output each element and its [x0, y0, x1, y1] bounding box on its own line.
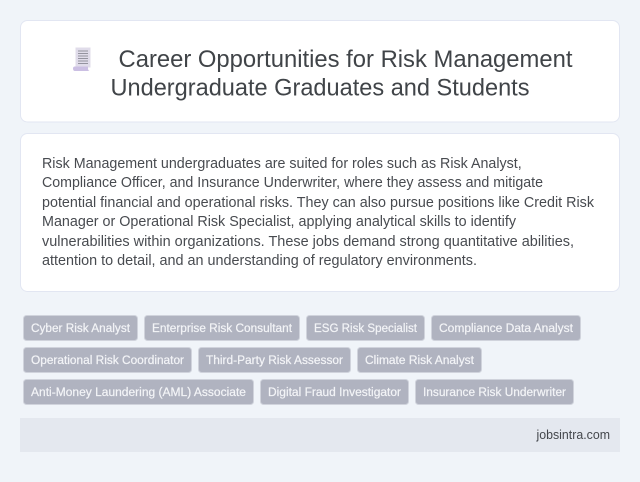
tag: Enterprise Risk Consultant: [144, 316, 300, 340]
tag: Digital Fraud Investigator: [260, 380, 408, 404]
description text: Compliance Officer, and Insurance Underwriter, where they assess and mitigate: [42, 175, 543, 191]
tag: Digital Fraud Investigator: Digital Fraud Investigator: [268, 385, 401, 399]
tag: Compliance Data Analyst: [432, 316, 580, 340]
tag: Climate Risk Analyst: [358, 348, 482, 372]
description text: Risk Management undergraduates are suited for roles such as Risk Analyst,: [42, 156, 522, 172]
tag: Insurance Risk Underwriter: [416, 380, 574, 404]
footer source: jobsintra.com: [536, 427, 610, 442]
heading: [110, 46, 573, 102]
tag: Operational Risk Coordinator: [24, 348, 192, 372]
tag: Operational Risk Coordinator: Operational Risk Coordinator: [31, 353, 184, 367]
tag: Anti-Money Laundering (AML) Associate: Anti-Money Laundering (AML) Associate: [31, 385, 246, 399]
heading: Career Opportunities for Risk Management: [118, 46, 573, 73]
tag: ESG Risk Specialist: [306, 316, 424, 340]
tag: ESG Risk Specialist: ESG Risk Specialist: [314, 321, 418, 335]
icon: document scroll: [73, 48, 90, 71]
tag: Enterprise Risk Consultant: Enterprise Risk Consultant: [152, 321, 293, 335]
job tags: [24, 316, 580, 404]
tag: Anti-Money Laundering (AML) Associate: [24, 380, 254, 404]
tag: Cyber Risk Analyst: Cyber Risk Analyst: [31, 321, 131, 335]
footer bar: [20, 418, 620, 452]
heading: Undergraduate Graduates and Students: [110, 74, 530, 102]
description text: potential financial and operational risks. They can also pursue positions like Credit Risk: [42, 195, 595, 211]
tag: Third-Party Risk Assessor: Third-Party Risk Assessor: [206, 353, 343, 367]
tag: Climate Risk Analyst: Climate Risk Analyst: [365, 353, 475, 367]
description panel: [20, 134, 620, 292]
description text: attention to detail, and an understanding of regulatory environments.: [42, 253, 477, 269]
description text: vulnerabilities within organizations. These jobs demand strong quantitative abilities,: [42, 234, 574, 250]
title card: [20, 20, 620, 122]
tag: Third-Party Risk Assessor: [198, 348, 350, 372]
description text: [42, 156, 595, 269]
tag: Compliance Data Analyst: Compliance Data Analyst: [439, 321, 574, 335]
tag: Cyber Risk Analyst: [24, 316, 138, 340]
description text: Manager or Operational Risk Specialist, applying analytical skills to identify: [42, 214, 517, 230]
tag: Insurance Risk Underwriter: Insurance Risk Underwriter: [423, 385, 566, 399]
